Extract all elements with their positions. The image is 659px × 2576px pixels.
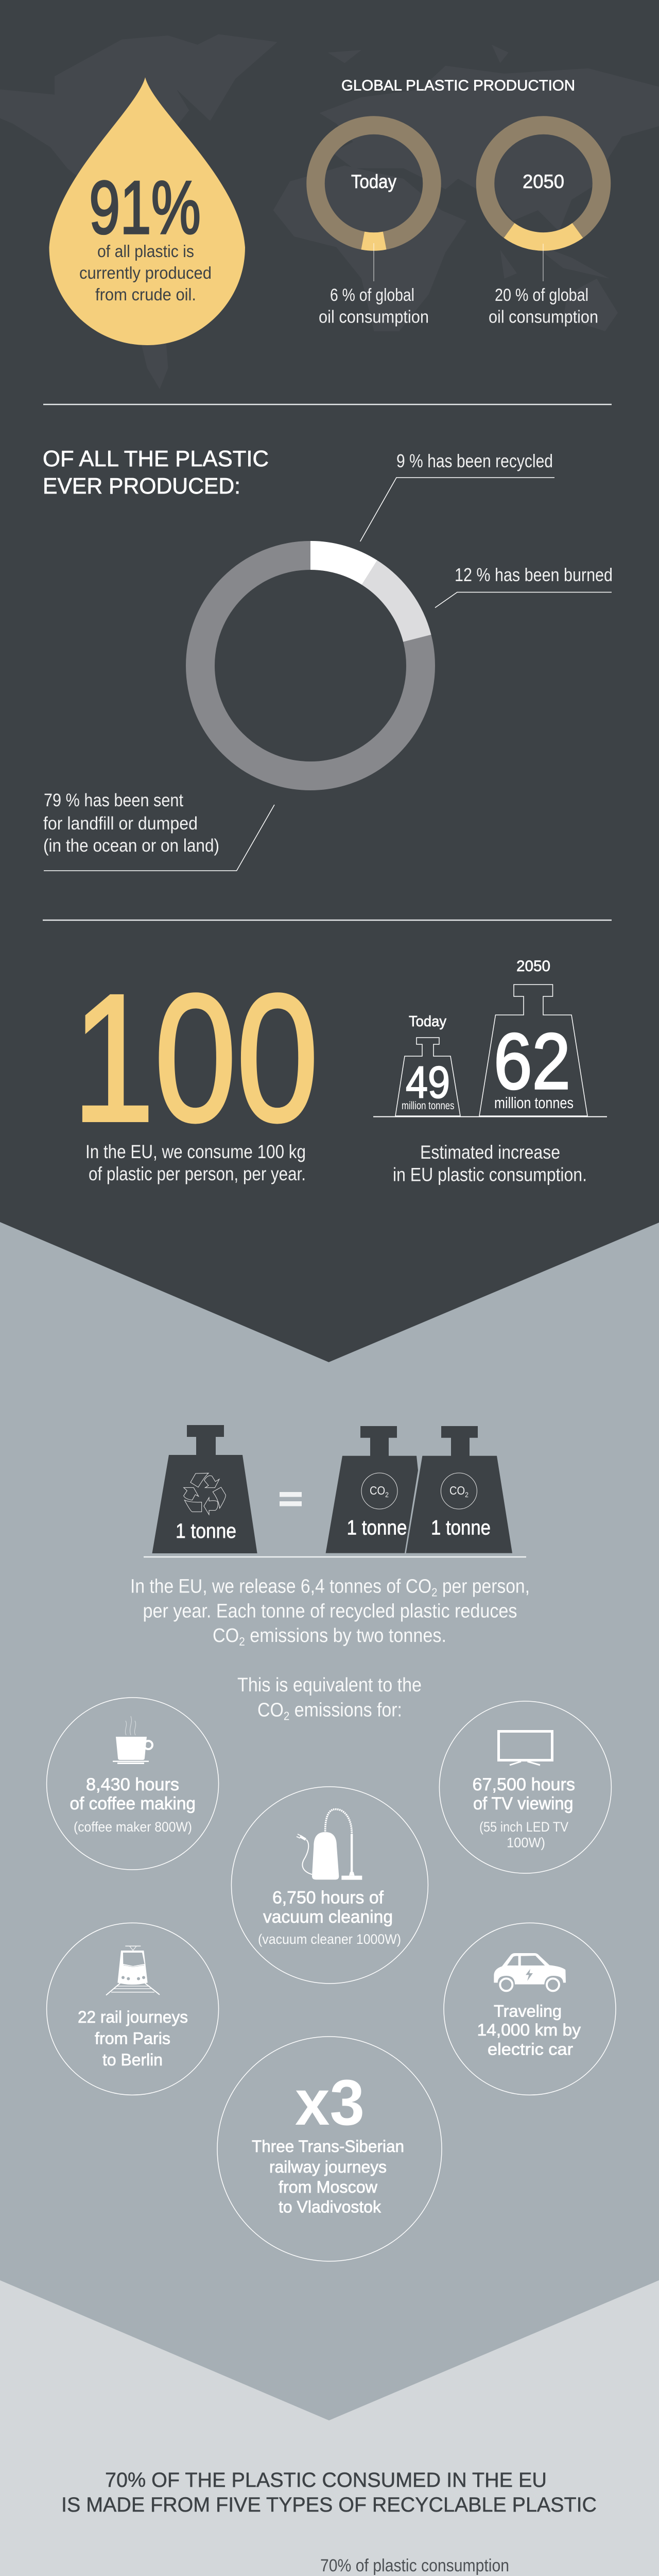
panel: dark plastic statistics background [0, 0, 659, 1362]
chart annotation: 70 percent of plastic consumption: 70% of plastic consumption [320, 2556, 509, 2575]
equals sign [280, 1492, 302, 1506]
bubble: Trans-Siberian journeys [217, 2037, 442, 2261]
text: CO2 per person: 2 [239, 1635, 245, 1648]
bubble: vacuum cleaning: 6,750 hours of [272, 1888, 384, 1908]
text: CO2 per person: In the EU, we release 6,4 tonnes of CO [130, 1575, 471, 1597]
callout: landfill [43, 790, 274, 871]
icon: weight 2050 62 million tonnes [479, 985, 587, 1116]
bubble: rail journeys: from Paris [95, 2029, 170, 2047]
text: CO2 per person: per person, [438, 1575, 530, 1597]
leader lines [374, 243, 543, 281]
stat: 91%: 91% [89, 165, 201, 249]
heading: global plastic production: GLOBAL PLASTIC PRODUCTION [341, 77, 575, 94]
label: 2050: 2050 [523, 171, 564, 192]
callout: recycled: 9 % has been recycled [396, 450, 553, 471]
callout: landfill: 79 % has been sent [44, 790, 183, 810]
icon: weight today 49 million tonnes [395, 1038, 460, 1116]
text: equivalent to: 2 [284, 1709, 289, 1723]
section: all plastic ever produced [43, 446, 613, 871]
caption: 20 percent: oil consumption [489, 307, 598, 327]
icon: CO2 weight two: 2 [465, 1490, 469, 1499]
icon: recycled plastic weight [152, 1425, 257, 1553]
drop caption [79, 242, 212, 304]
heading: 70 percent of the plastic consumed: 70% OF THE PLASTIC CONSUMED IN THE EU [105, 2469, 547, 2492]
bubble: electric car: Traveling [494, 2002, 562, 2021]
bubble: rail journeys [47, 1923, 219, 2095]
caption: 6 percent [319, 285, 429, 327]
bubble: electric car [444, 1923, 616, 2095]
caption: estimated increase: in EU plastic consumption. [393, 1164, 587, 1185]
stat: x3: x3 [295, 2067, 365, 2139]
text: equivalent to [237, 1674, 422, 1723]
section: recycled tonne equals two tonnes CO2 [130, 1425, 530, 1723]
icon: weight 2050 62 million tonnes: 62 [494, 1017, 570, 1106]
caption: 6 percent: 6 % of global [330, 285, 414, 305]
stat: 100: 100 [72, 956, 318, 1159]
donut chart: plastic fate [200, 555, 421, 776]
bubble: Trans-Siberian journeys: from Moscow [279, 2178, 378, 2196]
bubble: vacuum cleaning: (vacuum cleaner 1000W) [258, 1931, 401, 1947]
heading: 70 percent of the plastic consumed [61, 2469, 597, 2516]
heading: of all the plastic ever produced: EVER PRODUCED: [43, 473, 240, 499]
callout: landfill: for landfill or dumped [43, 814, 198, 834]
bubble: Trans-Siberian journeys: to Vladivostok [279, 2198, 381, 2216]
bubble: rail journeys: 22 rail journeys [78, 2008, 188, 2026]
text: CO2 per person: emissions by two tonnes. [245, 1625, 446, 1647]
icon: television [498, 1731, 552, 1765]
icon: CO2 weight two [406, 1426, 512, 1553]
heading: 70 percent of the plastic consumed: IS MADE FROM FIVE TYPES OF RECYCLABLE PLASTIC [61, 2494, 597, 2516]
caption: 100 kg per person [85, 1141, 306, 1184]
caption: 6 percent: oil consumption [319, 307, 429, 327]
caption: 100 kg per person: of plastic per person, per year. [89, 1163, 306, 1184]
caption: estimated increase: Estimated increase [420, 1142, 560, 1163]
icon: weight today 49 million tonnes: million tonnes [402, 1100, 454, 1112]
bubble: electric car: electric car [488, 2040, 573, 2059]
bubble: Trans-Siberian journeys: railway journeys [269, 2158, 387, 2176]
section: estimated increase in consumption [373, 958, 607, 1185]
bubble: rail journeys: to Berlin [102, 2050, 163, 2069]
text: equivalent to: emissions for: [289, 1699, 402, 1721]
icon: recycling arrows [184, 1473, 226, 1515]
caption: 100 kg per person: In the EU, we consume 100 kg [85, 1141, 306, 1162]
world map background [0, 34, 659, 389]
label: today: Today [409, 1013, 446, 1030]
icon: vacuum cleaner [297, 1809, 362, 1880]
label: Today: Today [351, 171, 396, 192]
bubble: coffee making: of coffee making [70, 1794, 196, 1814]
text: equivalent to: CO [257, 1699, 287, 1721]
bubble: Trans-Siberian journeys: Three Trans-Siberian [252, 2137, 404, 2156]
icon: coffee cup [113, 1716, 152, 1764]
section: EU consumption per person [72, 956, 318, 1184]
bubble: TV viewing: of TV viewing [473, 1794, 574, 1814]
icon: CO2 weight one [326, 1426, 418, 1553]
text: CO2 per person: CO [213, 1625, 242, 1647]
callout: landfill: (in the ocean or on land) [43, 836, 219, 856]
bubble: vacuum cleaning: vacuum cleaning [263, 1907, 393, 1927]
bubble: TV viewing: (55 inch LED TV [479, 1819, 568, 1835]
callout: recycled [360, 450, 554, 541]
bubble: TV viewing: 100W) [507, 1835, 545, 1851]
caption: estimated increase [393, 1142, 587, 1185]
icon: CO2 weight one: 1 tonne [347, 1516, 407, 1539]
icon: oil drop [49, 77, 245, 345]
drop caption: currently produced [79, 263, 212, 282]
icon: electric car [494, 1953, 566, 1991]
bubble: TV viewing [439, 1701, 611, 1873]
icon: train [106, 1946, 160, 1995]
caption: 20 percent: 20 % of global [495, 285, 588, 305]
bubble: electric car: 14,000 km by [477, 2021, 581, 2039]
heading: of all the plastic ever produced [43, 446, 269, 499]
bubble: TV viewing: 67,500 hours [473, 1775, 575, 1794]
icon: weight 2050 62 million tonnes: million tonnes [494, 1094, 574, 1112]
icon: CO2 weight two: 1 tonne [431, 1516, 491, 1539]
drop caption: from crude oil. [95, 285, 196, 304]
icon: CO2 weight one: 2 [385, 1490, 389, 1499]
text: CO2 per person: 2 [431, 1586, 438, 1599]
callout: burned [435, 564, 613, 608]
icon: recycled plastic weight: 1 tonne [176, 1520, 236, 1543]
text: equivalent to: This is equivalent to the [237, 1674, 422, 1696]
ring chart: 2050 [485, 125, 601, 242]
caption: 20 percent [489, 285, 598, 327]
section: oil drop statistic [49, 77, 245, 345]
scale baseline [373, 1116, 607, 1117]
bubble: coffee making [47, 1698, 219, 1870]
section: global plastic production [316, 77, 601, 327]
heading: of all the plastic ever produced: OF ALL THE PLASTIC [43, 446, 269, 471]
icon: CO2 weight one: CO [370, 1484, 387, 1497]
icon: weight today 49 million tonnes: 49 [406, 1058, 450, 1108]
bubble: vacuum cleaning [231, 1787, 428, 1984]
text: CO2 per person [130, 1575, 530, 1648]
icon: CO2 weight two: CO [449, 1484, 467, 1497]
drop caption: of all plastic is [97, 242, 194, 261]
callout: burned: 12 % has been burned [455, 564, 613, 585]
label: 2050: 2050 [516, 958, 550, 975]
bubble: coffee making: (coffee maker 800W) [74, 1819, 192, 1835]
bubble: coffee making: 8,430 hours [86, 1775, 179, 1794]
ring chart: today [316, 125, 432, 242]
text: CO2 per person: per year. Each tonne of recycled plastic reduces [143, 1601, 517, 1622]
scale baseline [144, 1556, 526, 1557]
